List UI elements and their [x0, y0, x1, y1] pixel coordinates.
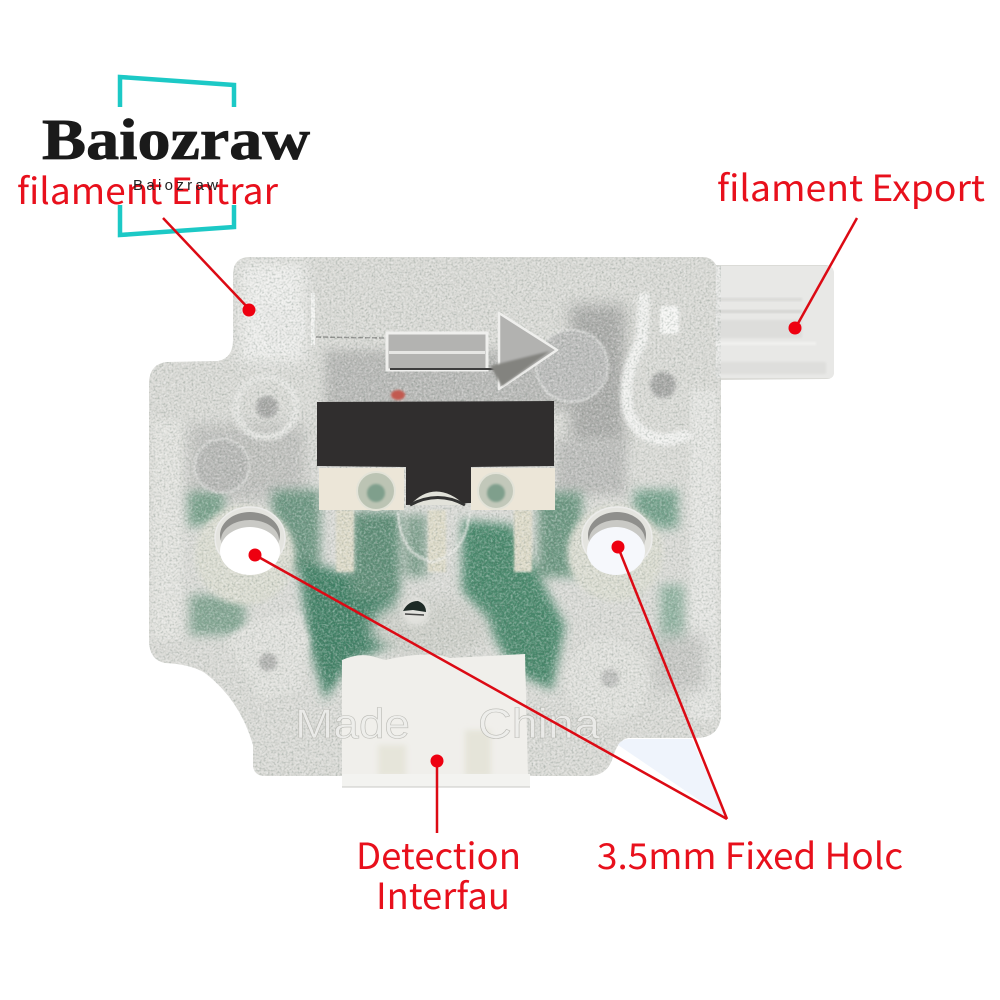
leader: filament entrance	[163, 218, 256, 316]
logo: small brand name: Baiozraw	[133, 177, 218, 194]
moulded arrow	[387, 313, 557, 389]
upper-left mounting boss	[195, 377, 296, 493]
label: Detection Interface	[356, 828, 521, 920]
leader: right fixed hole	[612, 540, 727, 819]
left fixed hole	[215, 507, 285, 575]
cream collars around fixed holes	[195, 505, 295, 605]
embossed text: Made: Made	[295, 700, 410, 747]
panel: sensor module photo	[149, 257, 834, 787]
leader: filament export	[788, 218, 857, 334]
microswitch: pins	[336, 510, 532, 572]
housing interior shading	[152, 262, 834, 722]
housing speckle texture	[149, 257, 721, 777]
circular window	[536, 330, 608, 402]
leader: detection interface	[430, 754, 444, 833]
right fixed hole	[582, 507, 652, 575]
mounting bosses lower	[226, 612, 314, 660]
embossed text: China: China	[478, 700, 601, 747]
upper-right hook moulding	[627, 298, 685, 440]
label: Detection Interface: Detection	[356, 828, 521, 880]
logo: teal bracket	[120, 77, 234, 235]
label: Detection Interface: Interfau	[376, 868, 510, 920]
filament entrance funnel	[262, 293, 385, 345]
body: translucent housing	[149, 257, 834, 787]
centre lighter area below connector pins	[370, 598, 490, 658]
white connector	[342, 654, 530, 787]
leader: left fixed hole	[248, 548, 727, 819]
microswitch: black body	[317, 401, 554, 505]
blue corner reflection	[618, 739, 727, 819]
microswitch: red dot	[391, 390, 405, 400]
small through hole	[402, 598, 430, 626]
microswitch: cream terminals	[319, 468, 555, 510]
label: 3.5mm fixed hole: 3.5mm Fixed Holc	[597, 828, 903, 880]
PCB green traces	[188, 490, 684, 700]
logo: brand name: Baiozraw	[42, 107, 310, 172]
label: filament Entrar: filament Entrar	[17, 163, 279, 215]
label: filament Export: filament Export	[717, 160, 985, 212]
